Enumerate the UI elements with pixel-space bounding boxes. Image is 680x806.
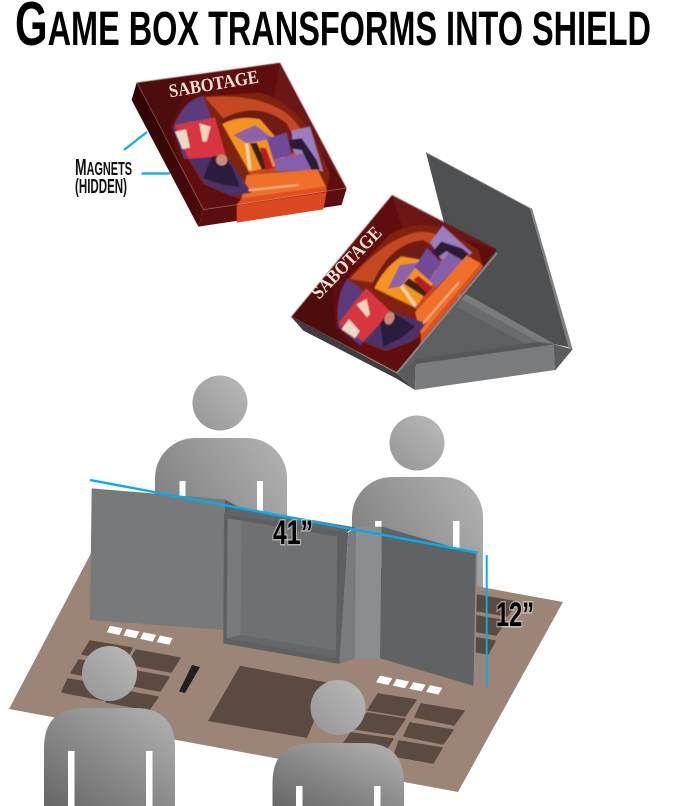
center tray bottom wall <box>227 635 336 658</box>
right panel edge <box>474 554 477 686</box>
magnets label: MAGNETS <box>75 154 132 180</box>
player: front right <box>272 680 404 806</box>
box cover artwork <box>137 63 347 210</box>
cover hinge edge <box>397 253 497 373</box>
spine <box>355 527 382 658</box>
far player tiles <box>442 594 517 654</box>
table mat <box>9 519 563 792</box>
height dimension line <box>486 555 488 687</box>
top strip <box>224 507 355 532</box>
left shield panel <box>90 488 225 630</box>
opened box cover <box>282 146 507 422</box>
right score cards <box>376 676 442 695</box>
central board area <box>208 666 330 738</box>
magnets label <box>75 154 132 198</box>
right player tiles <box>341 694 464 763</box>
tray <box>291 294 573 390</box>
player: back right <box>352 416 483 677</box>
cover artwork <box>282 146 507 422</box>
closed game box <box>132 63 347 227</box>
player: front left <box>44 646 175 806</box>
width dimension line <box>90 480 478 553</box>
left score cards <box>107 626 173 645</box>
width label: 41” <box>273 514 313 552</box>
center tray rim <box>223 513 348 664</box>
top bevel <box>225 499 237 513</box>
box left side <box>132 83 203 227</box>
lid <box>426 153 573 349</box>
height label: 12” <box>496 596 534 634</box>
box front side <box>198 188 347 227</box>
player: back left <box>155 376 287 638</box>
magnets label: (HIDDEN) <box>75 176 127 198</box>
left player tiles <box>62 641 180 710</box>
shield <box>90 488 477 686</box>
right shield panel <box>380 527 477 686</box>
center tray left wall <box>227 518 242 638</box>
tray side <box>339 527 356 664</box>
cover title: SABOTAGE <box>307 223 387 303</box>
opened box shell <box>291 153 573 390</box>
center tray floor <box>241 521 337 651</box>
slot <box>179 665 200 693</box>
magnet pointer lines <box>124 132 170 174</box>
cover title: SABOTAGE <box>167 67 260 102</box>
